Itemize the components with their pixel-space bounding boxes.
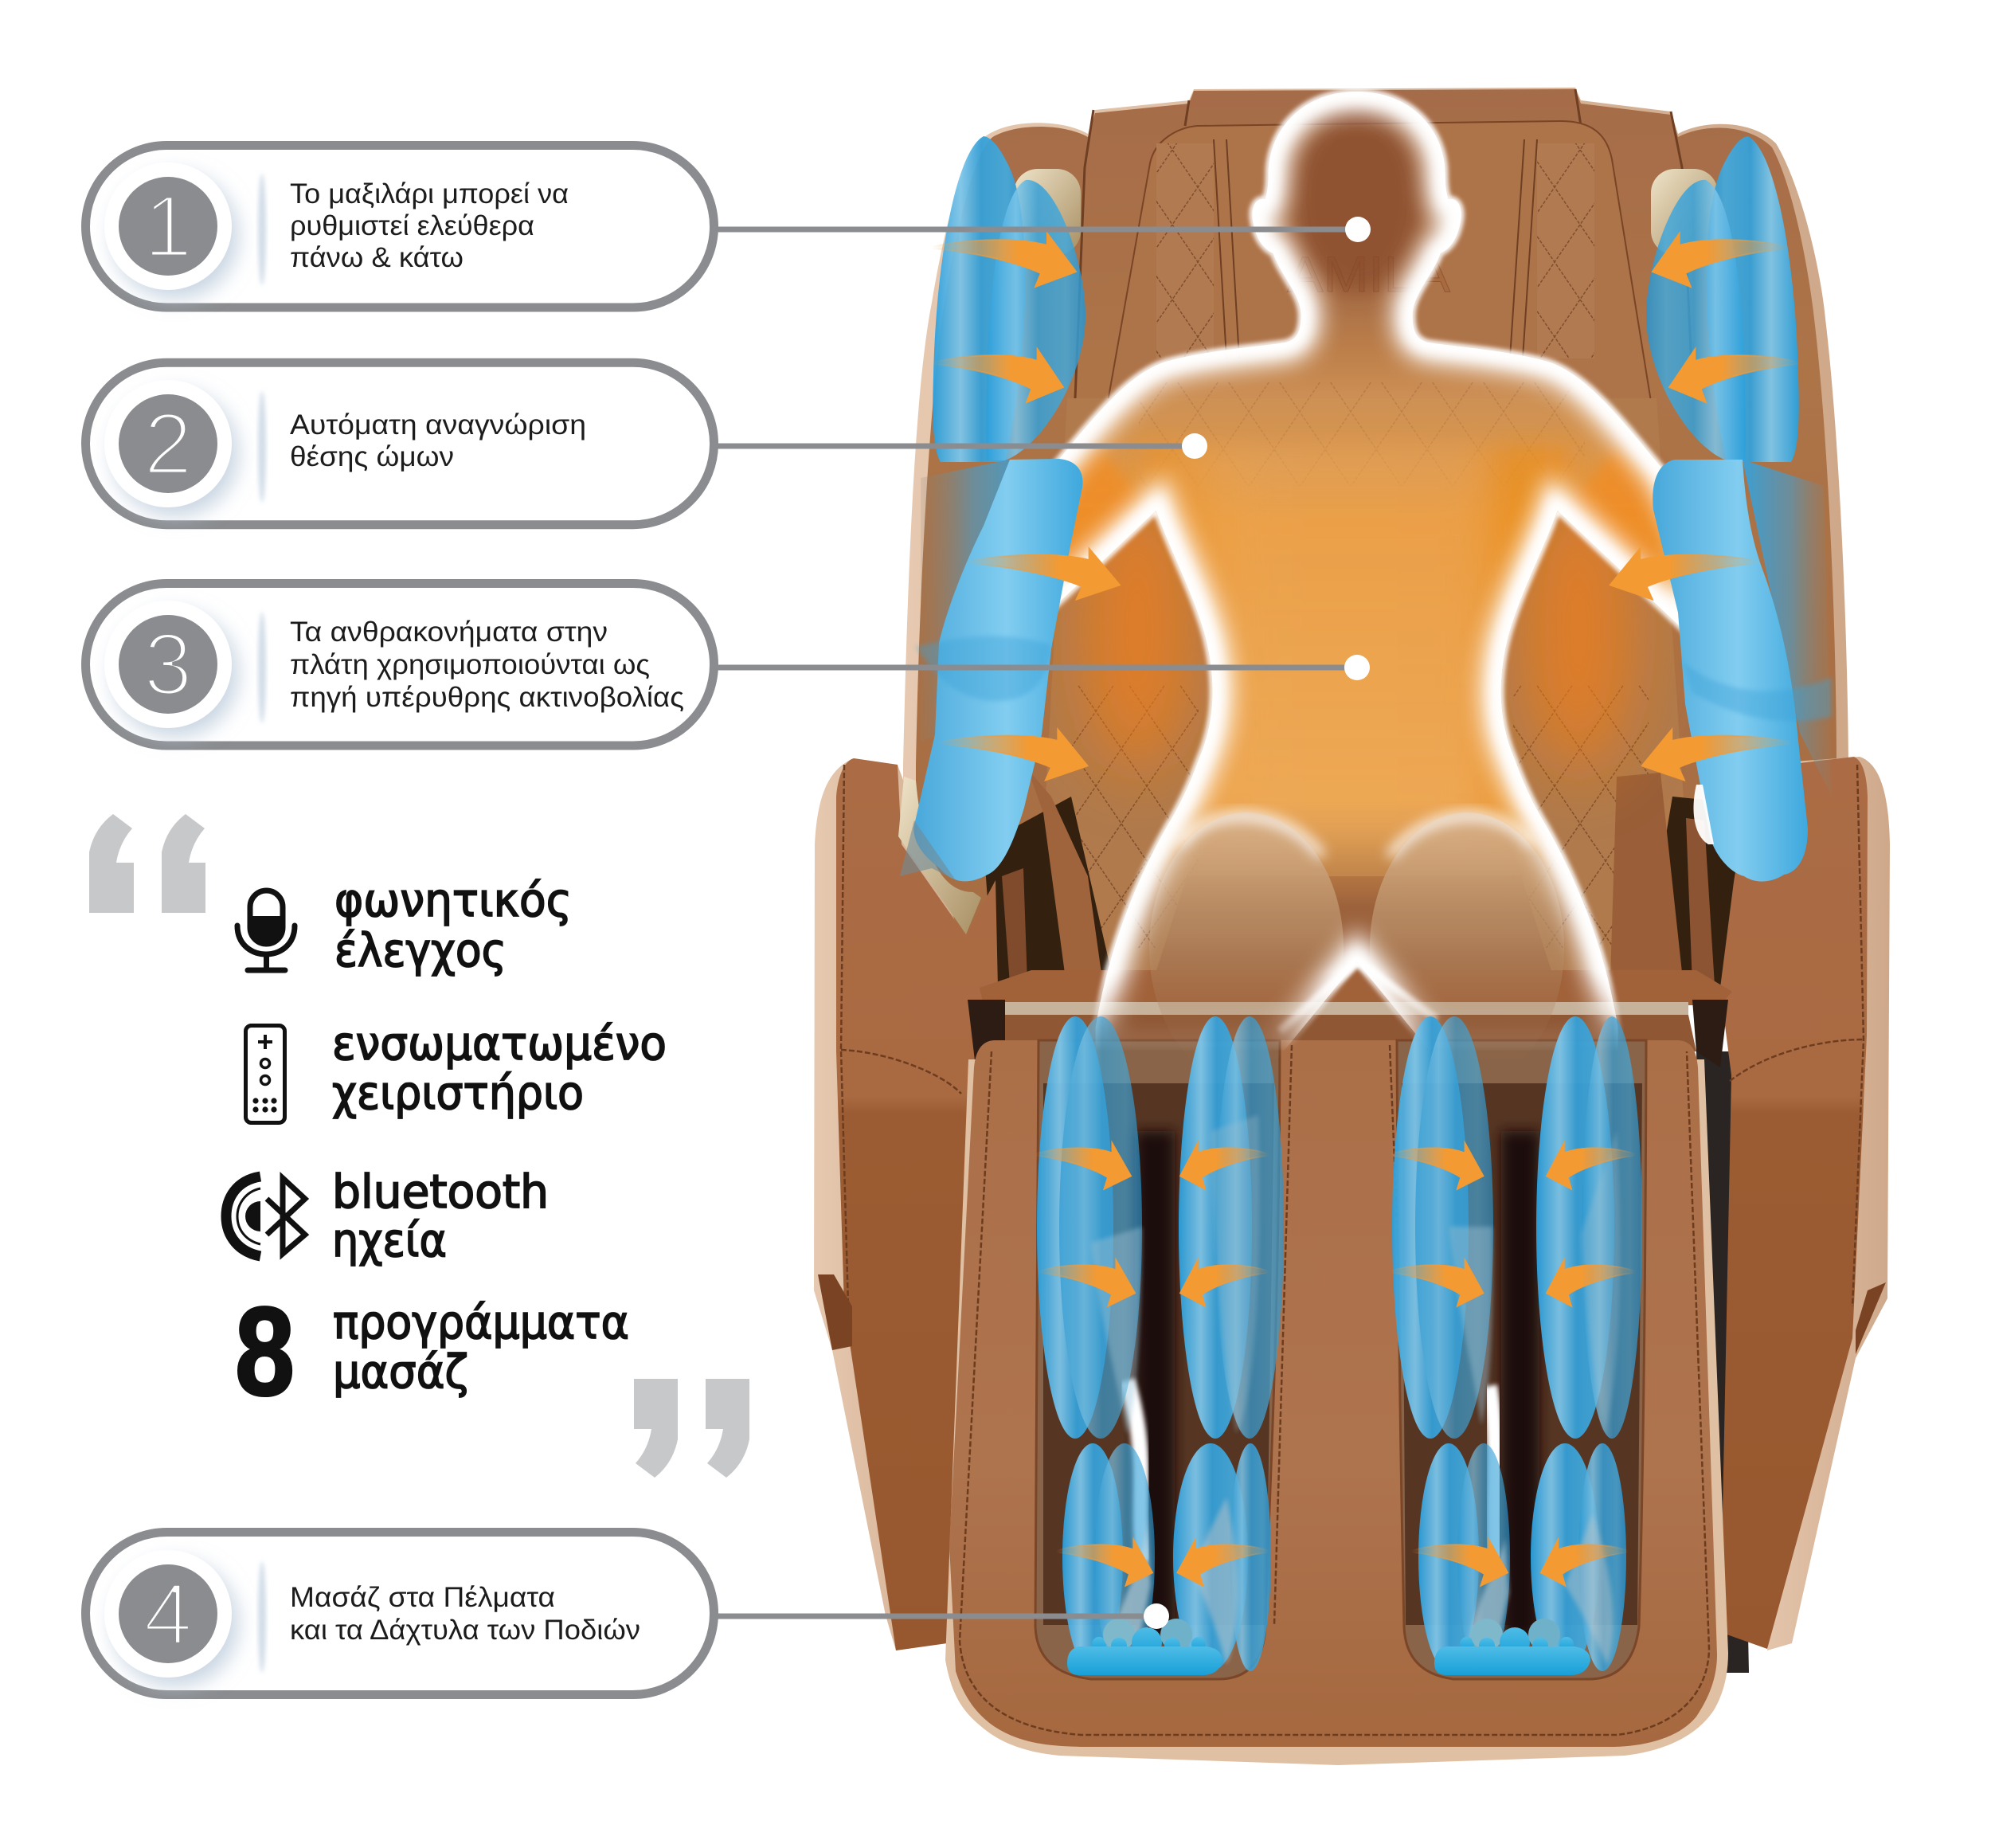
leg group 2 xyxy=(1179,1016,1284,1439)
dark joints xyxy=(968,1000,1728,1067)
foot group 2 xyxy=(1173,1443,1271,1671)
badge 3: 3 xyxy=(143,616,193,714)
left arm seam xyxy=(841,765,961,1306)
foot group 4 xyxy=(1531,1443,1626,1671)
left side dark gap xyxy=(984,797,1115,988)
badge 1: 1 xyxy=(143,178,193,276)
text 2: θέσης ώμων xyxy=(290,441,454,472)
orange arrows xyxy=(932,233,1799,1586)
icon: closing quote xyxy=(634,1379,749,1478)
left elbow band xyxy=(916,636,1051,701)
quilted strips xyxy=(1156,139,1594,358)
backrest outer shell xyxy=(903,88,1848,1004)
feature: remote: ενσωματωμένο xyxy=(332,1016,667,1071)
feature: remote: χειριστήριο xyxy=(332,1066,584,1120)
seat flap xyxy=(980,970,1732,1005)
wing left xyxy=(933,136,1085,462)
divider 2 xyxy=(258,391,266,503)
backrest brown xyxy=(916,89,1836,1004)
text 3: πηγή υπέρυθρης ακτινοβολίας xyxy=(290,682,684,713)
text 3: Τα ανθρακονήματα στην xyxy=(290,617,608,648)
left leg cavity xyxy=(1035,1040,1280,1679)
right side dark gap xyxy=(1641,797,1752,988)
left armrest brown xyxy=(836,758,998,1650)
callout 3 xyxy=(86,583,714,746)
right arm seam xyxy=(1730,765,1864,1306)
left arm fade xyxy=(921,460,1035,741)
text 1: Το μαξιλάρι μπορεί να xyxy=(290,178,569,209)
left pocket xyxy=(1002,868,1027,984)
feature: massage programs: προγράμματα xyxy=(333,1295,629,1349)
right hand white xyxy=(1693,785,1714,844)
badge 4 xyxy=(104,1550,232,1678)
right armrest brown xyxy=(1720,757,1868,1649)
leg group 4 xyxy=(1536,1016,1642,1439)
massage chair xyxy=(814,88,1890,1765)
text 1: πάνω & κάτω xyxy=(290,242,464,273)
legrest cream xyxy=(945,1059,1728,1765)
left arm root heat xyxy=(1069,449,1137,592)
right arm root heat xyxy=(1578,449,1661,567)
buttock right xyxy=(1370,812,1564,1015)
left armrest cream xyxy=(814,758,980,1650)
text 1: ρυθμιστεί ελεύθερα xyxy=(290,210,534,241)
inner white glow xyxy=(1059,92,1679,1048)
callout 4 xyxy=(86,1533,714,1695)
head pillow xyxy=(1107,121,1652,406)
badge 2 xyxy=(104,380,232,507)
icon: number 8: 8 xyxy=(235,1282,295,1422)
logo: AMILA xyxy=(1287,247,1450,303)
icon: microphone xyxy=(237,891,295,970)
icon: remote xyxy=(245,1026,285,1123)
connector 1 xyxy=(717,217,1371,242)
airbags: wings xyxy=(933,136,1799,462)
thigh edges xyxy=(1280,961,1437,1032)
buttock left xyxy=(1149,812,1344,1015)
right dark strip xyxy=(1696,1051,1749,1673)
zipper xyxy=(1005,1002,1688,1015)
badge 3 xyxy=(104,601,232,728)
connector 4 xyxy=(717,1603,1169,1629)
soft outer edge xyxy=(1051,88,1680,1047)
feature: voice control: έλεγχος xyxy=(334,923,507,977)
feature: bluetooth speakers: bluetooth xyxy=(332,1165,549,1219)
badge 2: 2 xyxy=(143,395,193,493)
foot group 1 xyxy=(1062,1443,1155,1671)
head shade xyxy=(1289,104,1425,295)
right pocket xyxy=(1686,818,1715,985)
badge 4: 4 xyxy=(143,1565,193,1663)
right elbow band xyxy=(1682,661,1832,722)
body silhouette xyxy=(956,92,1752,1573)
wing speaker right xyxy=(1651,169,1718,255)
callout 2 xyxy=(86,362,714,525)
right leg cavity xyxy=(1397,1040,1646,1679)
foot plate right xyxy=(1434,1619,1590,1675)
connector 2 xyxy=(717,433,1207,459)
right arm airbag xyxy=(1653,460,1808,882)
quilt lower xyxy=(1063,382,1649,948)
icon: bluetooth speaker xyxy=(226,1177,305,1256)
divider 1 xyxy=(258,174,266,285)
feature: voice control: φωνητικός xyxy=(334,873,572,927)
airbags: legs xyxy=(1037,1016,1642,1671)
airbags: arms xyxy=(900,459,1832,882)
heat glow on seat sides xyxy=(1082,486,1634,773)
headrest seam lines xyxy=(1075,89,1693,398)
shin left xyxy=(1127,1380,1144,1561)
badge 1 xyxy=(104,162,232,290)
feature: bluetooth speakers: ηχεία xyxy=(332,1213,447,1267)
text 4: Μασάζ στα Πέλματα xyxy=(290,1582,555,1613)
right side cushion xyxy=(1610,773,1683,980)
feature: massage programs: μασάζ xyxy=(333,1345,468,1399)
text 3: πλάτη χρησιμοποιούνται ως xyxy=(290,649,650,680)
text 2: Αυτόματη αναγνώριση xyxy=(290,409,586,440)
left arm gold panel xyxy=(898,777,981,934)
legrest brown xyxy=(949,1040,1717,1747)
divider 4 xyxy=(258,1561,266,1673)
callout 1 xyxy=(86,145,714,307)
foot plate left xyxy=(1067,1619,1222,1675)
left side cushion xyxy=(1027,769,1101,973)
wing speaker left xyxy=(1014,169,1081,255)
lower back cushion xyxy=(1035,398,1696,988)
seat front xyxy=(1005,1015,1696,1051)
lower arm band xyxy=(818,1274,1886,1354)
left arm airbag xyxy=(913,459,1083,881)
connector 3 xyxy=(717,655,1370,680)
icon: opening quote xyxy=(89,814,205,913)
text 4: και τα Δάχτυλα των Ποδιών xyxy=(290,1615,640,1646)
divider 3 xyxy=(258,612,266,723)
wing right xyxy=(1646,136,1799,462)
leg group 3 xyxy=(1392,1016,1493,1439)
leg group 1 xyxy=(1037,1016,1142,1439)
torso heat xyxy=(1059,92,1679,1051)
foot group 3 xyxy=(1418,1443,1510,1671)
shin right xyxy=(1489,1386,1497,1573)
right armrest cream xyxy=(1752,757,1890,1650)
legrest seam xyxy=(960,1045,1709,1735)
buttock outline xyxy=(1179,816,1533,856)
left hand fade xyxy=(900,820,956,880)
right arm fade xyxy=(1743,460,1832,797)
seat cushion bottom xyxy=(1155,876,1553,976)
